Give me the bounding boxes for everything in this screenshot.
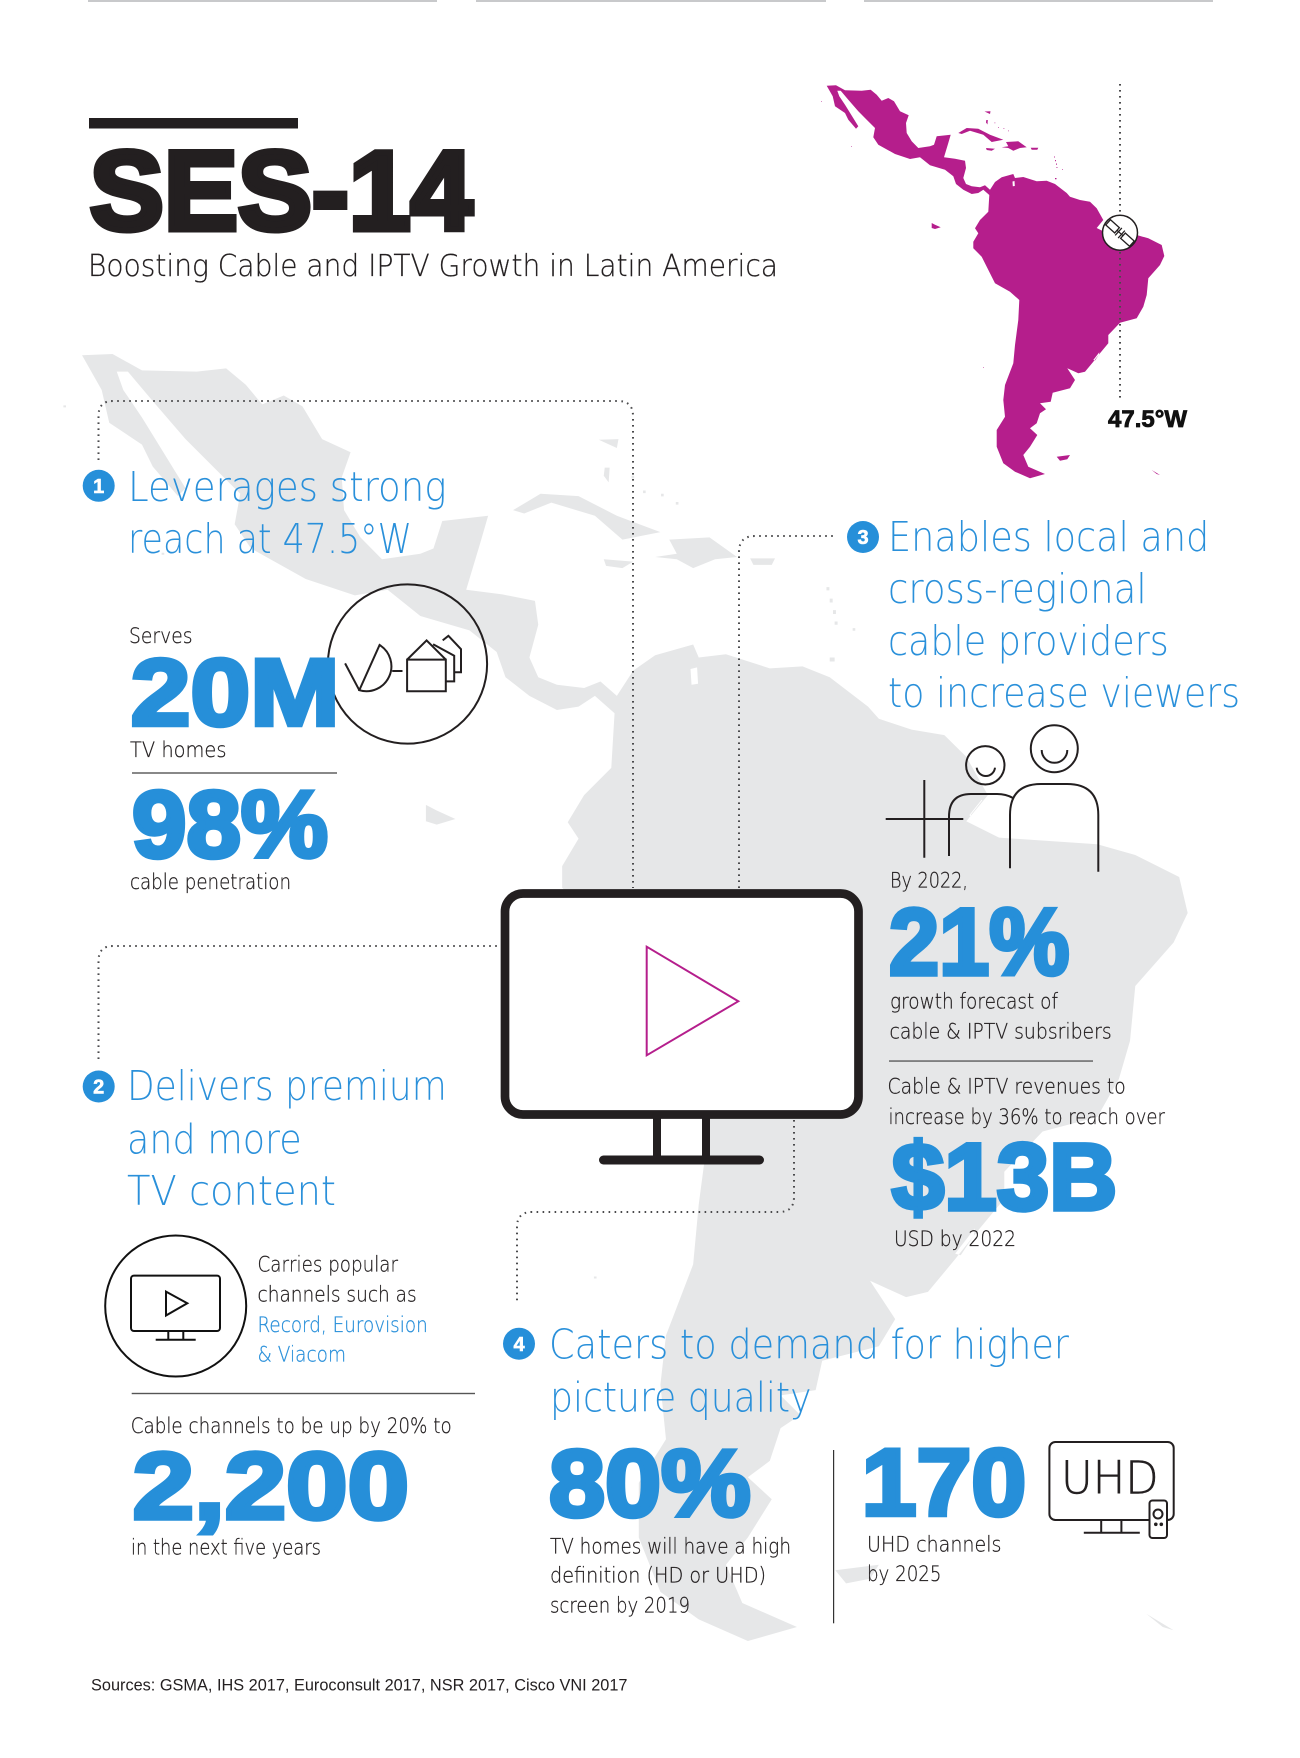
subtitle: Boosting Cable and IPTV Growth in Latin America bbox=[88, 249, 778, 284]
badge 2 bbox=[83, 1070, 115, 1102]
icon: satellite bbox=[1102, 215, 1138, 250]
stat: 170 UHD channels: 170 bbox=[862, 1430, 1026, 1536]
stat: 2,200 channels: 2,200 bbox=[133, 1433, 409, 1539]
heading 4 bbox=[549, 1320, 1069, 1422]
stat: 170 UHD channels: by 2025 bbox=[867, 1562, 942, 1586]
map: Latin America highlighted bbox=[821, 85, 1164, 478]
icon: UHD TV and remote: UHD bbox=[1061, 1451, 1159, 1504]
badge 2: 2 bbox=[93, 1077, 104, 1099]
heading 3: cable providers bbox=[888, 617, 1169, 665]
TV stand bbox=[657, 1118, 706, 1160]
TV screen bbox=[505, 894, 858, 1114]
stat: 20M TV homes: 20M bbox=[131, 640, 340, 746]
heading 2: TV content bbox=[127, 1167, 336, 1215]
stat: 2,200 channels bbox=[131, 1414, 452, 1560]
stat: 20M TV homes: TV homes bbox=[130, 738, 226, 762]
dotted connectors bbox=[98, 401, 836, 1303]
title: SES-14 bbox=[90, 129, 472, 254]
stat: $13B revenues: USD by 2022 bbox=[894, 1227, 1016, 1251]
icon: UHD TV and remote bbox=[1049, 1442, 1174, 1538]
background map of Latin America bbox=[63, 354, 1188, 1641]
stat: 170 UHD channels: UHD channels bbox=[867, 1533, 1002, 1557]
stat: 21% growth: growth forecast of bbox=[890, 989, 1059, 1013]
stat: 98% cable penetration: cable penetration bbox=[130, 870, 291, 894]
vertical divider bbox=[833, 1450, 834, 1623]
panel 4: picture quality bbox=[503, 1320, 1174, 1623]
icon: TV in circle bbox=[105, 1236, 246, 1376]
stat: $13B revenues: increase by 36% to reach over bbox=[888, 1105, 1165, 1129]
heading 4: Caters to demand for higher bbox=[549, 1320, 1069, 1368]
stat: 80% HD homes: definition (HD or UHD) bbox=[550, 1564, 766, 1588]
badge 4 bbox=[503, 1328, 535, 1360]
channels text: & Viacom bbox=[258, 1342, 346, 1366]
heading 1: Leverages strong bbox=[128, 463, 446, 511]
stat: 20M TV homes: Serves bbox=[129, 624, 192, 648]
heading 4: picture quality bbox=[550, 1374, 812, 1422]
play triangle bbox=[647, 947, 738, 1055]
orbital position line bbox=[1119, 84, 1121, 398]
sources: Sources: GSMA, IHS 2017, Euroconsult 2017, NSR 2017, Cisco VNI 2017 bbox=[91, 1676, 628, 1694]
stat: 170 UHD channels bbox=[862, 1430, 1026, 1586]
stat: 80% HD homes: 80% bbox=[549, 1431, 751, 1537]
stat: 80% HD homes bbox=[549, 1431, 791, 1618]
panel 1: reach bbox=[83, 463, 487, 894]
icon: dish and houses bbox=[328, 584, 487, 744]
heading 3: to increase viewers bbox=[888, 669, 1240, 717]
channels text: Record, Eurovision bbox=[258, 1313, 428, 1337]
title bar bbox=[89, 118, 298, 128]
badge 3 bbox=[847, 521, 879, 553]
stat: 21% growth bbox=[889, 869, 1112, 1044]
stat: $13B revenues bbox=[888, 1074, 1165, 1251]
badge 3: 3 bbox=[857, 527, 869, 549]
stat: 21% growth: 21% bbox=[889, 890, 1069, 996]
stat: $13B revenues: $13B bbox=[892, 1124, 1117, 1230]
heading 2: Delivers premium bbox=[127, 1062, 447, 1110]
divider bbox=[889, 1060, 1093, 1062]
stat: $13B revenues: Cable & IPTV revenues to bbox=[888, 1074, 1126, 1098]
heading 3: Enables local and bbox=[888, 513, 1209, 561]
stat: 21% growth: cable & IPTV subsribers bbox=[890, 1020, 1112, 1044]
panel 2: content bbox=[83, 1062, 475, 1560]
heading 1: reach at 47.5°W bbox=[128, 515, 412, 563]
top rules bbox=[88, 0, 1213, 2]
stat: 21% growth: By 2022, bbox=[890, 869, 968, 893]
channels text bbox=[258, 1252, 428, 1366]
channels text: channels such as bbox=[258, 1283, 417, 1307]
stat: 98% cable penetration: 98% bbox=[132, 772, 328, 878]
central TV with play button bbox=[505, 894, 858, 1160]
heading 2 bbox=[127, 1062, 447, 1215]
purple coverage map with satellite bbox=[821, 84, 1187, 478]
icon: people and plus bbox=[886, 725, 1098, 872]
divider bbox=[132, 772, 337, 774]
heading 3 bbox=[888, 513, 1240, 717]
badge 1: 1 bbox=[93, 476, 104, 498]
title block bbox=[88, 118, 778, 284]
stat: 2,200 channels: in the next five years bbox=[131, 1536, 321, 1560]
stat: 20M TV homes bbox=[129, 624, 340, 762]
heading 2: and more bbox=[127, 1115, 302, 1163]
heading 3: cross-regional bbox=[888, 565, 1147, 613]
badge 1 bbox=[83, 470, 115, 502]
stat: 80% HD homes: TV homes will have a high bbox=[550, 1534, 791, 1558]
heading 1 bbox=[128, 463, 446, 563]
badge 4: 4 bbox=[513, 1334, 525, 1356]
divider bbox=[132, 1393, 475, 1394]
channels text: Carries popular bbox=[258, 1252, 398, 1276]
stat: 80% HD homes: screen by 2019 bbox=[550, 1594, 690, 1618]
orbital position label: 47.5°W bbox=[1108, 406, 1187, 433]
panel 3: providers bbox=[847, 513, 1240, 1251]
stat: 2,200 channels: Cable channels to be up by 20% to bbox=[131, 1414, 452, 1438]
